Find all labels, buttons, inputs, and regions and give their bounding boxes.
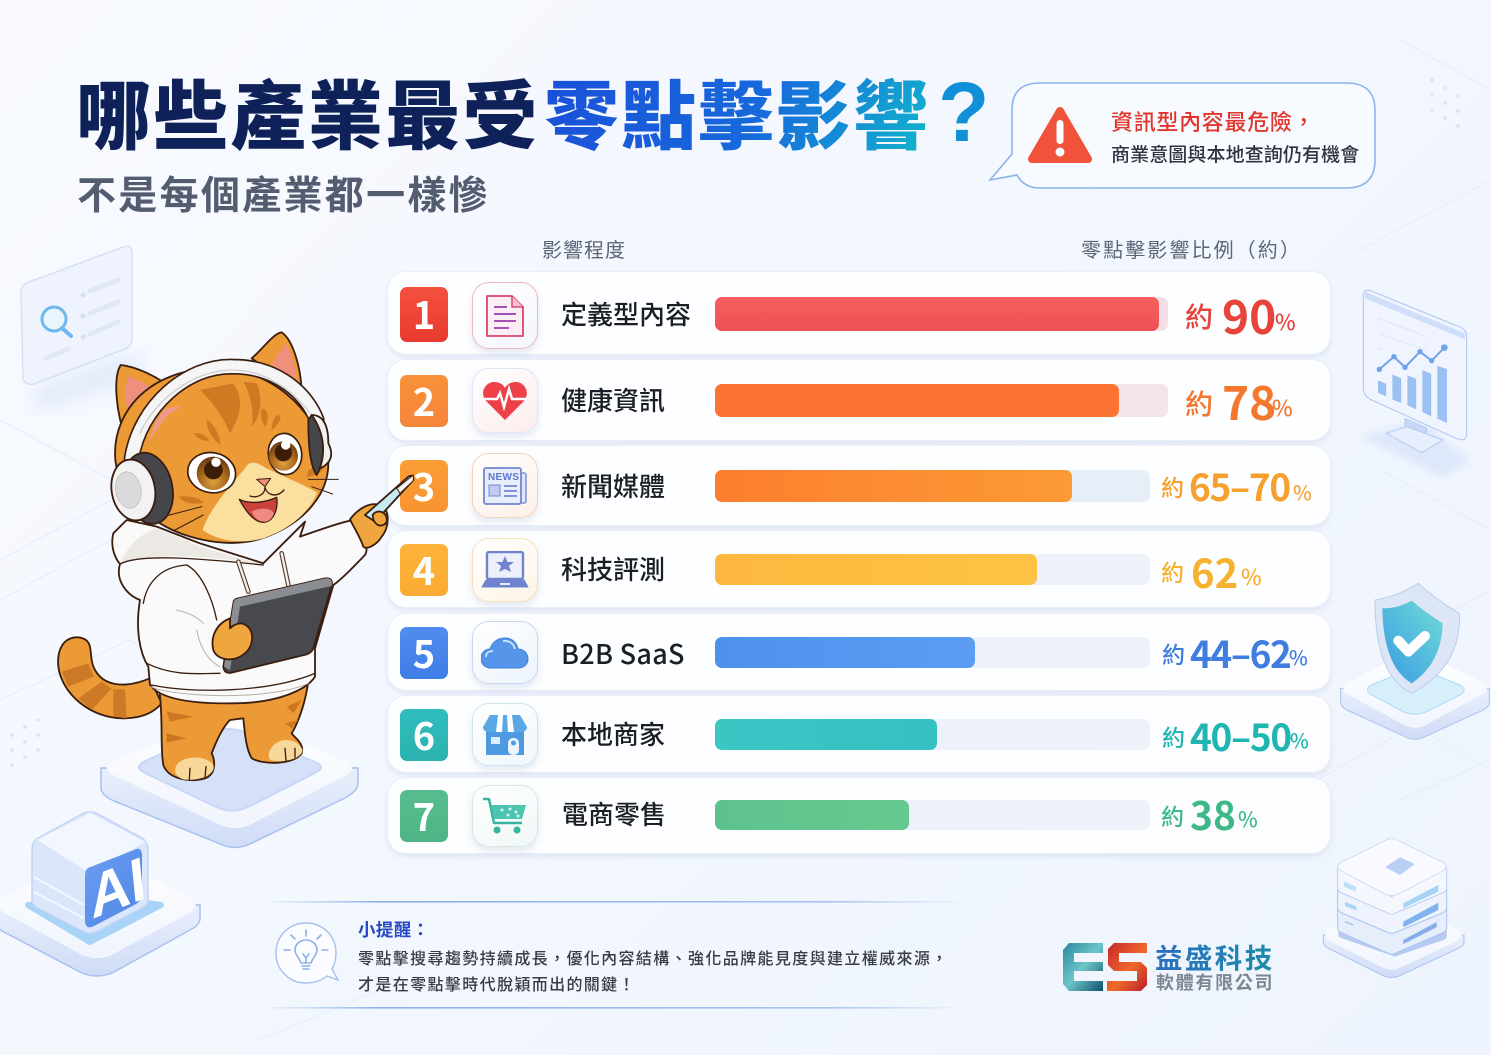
value	[1161, 786, 1258, 842]
label: 科技評測	[561, 550, 665, 587]
title question mark: ?	[938, 65, 989, 159]
rank 3	[400, 460, 448, 512]
value: 約	[1185, 296, 1213, 336]
value: 65–70	[1189, 458, 1290, 512]
divider bottom	[273, 1007, 952, 1009]
value: %	[1275, 305, 1296, 337]
value	[1161, 458, 1312, 512]
icon: AI cube on platform	[0, 812, 200, 976]
rank 6	[400, 709, 448, 761]
platform under cat	[101, 716, 358, 848]
value: 約	[1161, 554, 1184, 588]
tip text: 才是在零點擊時代脫穎而出的關鍵！	[358, 970, 636, 994]
rank 7: 7	[413, 786, 435, 842]
nose and mouth	[239, 478, 284, 522]
eyes	[185, 431, 304, 497]
head	[115, 368, 338, 543]
value: %	[1290, 725, 1309, 754]
divider top	[273, 901, 952, 903]
label: 定義型內容	[561, 295, 691, 332]
logo subtitle: 軟體有限公司	[1156, 969, 1274, 995]
label: 本地商家	[561, 715, 665, 752]
column header: impact level: 影響程度	[542, 234, 626, 263]
rank 7	[400, 790, 448, 842]
cat mascot	[57, 331, 414, 782]
ears	[116, 332, 302, 442]
rank 2	[400, 375, 448, 427]
value: 44–62	[1190, 625, 1290, 679]
rank 2: 2	[413, 372, 435, 426]
row 7: ecommerce	[388, 778, 1330, 853]
rank 5: 5	[413, 624, 435, 678]
row 4: tech review	[388, 531, 1330, 607]
bar	[715, 470, 1150, 502]
bar	[715, 297, 1168, 331]
company logo	[1063, 936, 1275, 995]
tablet	[223, 578, 332, 673]
value	[1162, 708, 1309, 762]
callout headline: 資訊型內容最危險，	[1111, 105, 1315, 137]
tail	[58, 637, 162, 718]
hand on tablet	[212, 618, 252, 659]
value: %	[1289, 642, 1308, 671]
value: 62	[1191, 542, 1238, 600]
bar	[715, 384, 1168, 417]
row 6: local business	[388, 696, 1330, 772]
label: 健康資訊	[561, 381, 665, 418]
callout body: 商業意圖與本地查詢仍有機會	[1111, 140, 1359, 167]
tip text: 零點擊搜尋趨勢持續成長，優化內容結構、強化品牌能見度與建立權威來源，	[358, 945, 949, 969]
icon: shopping cart	[472, 785, 538, 847]
value: 40–50	[1190, 708, 1291, 762]
rank 1	[400, 287, 448, 342]
value: 約	[1161, 469, 1184, 503]
column header: zero-click ratio: 零點擊影響比例（約）	[1081, 234, 1302, 263]
icon: monitor chart	[1360, 290, 1470, 478]
icon: search card	[21, 246, 140, 410]
rank 4: 4	[413, 540, 435, 596]
pointing hand	[350, 504, 388, 548]
value	[1161, 542, 1262, 600]
value: %	[1238, 804, 1258, 834]
subtitle: 不是每個產業都一樣慘	[77, 165, 490, 221]
value: %	[1272, 391, 1293, 423]
value: 約	[1162, 636, 1185, 670]
bar	[715, 719, 1150, 750]
icon: server stack	[1323, 839, 1464, 977]
rank 4	[400, 544, 448, 596]
value	[1185, 282, 1296, 348]
tip text	[358, 945, 949, 994]
rank 3: 3	[413, 456, 435, 512]
logo name: 益盛科技	[1155, 936, 1275, 976]
rank 1: 1	[413, 285, 435, 340]
logo mark	[1063, 943, 1147, 991]
icon: newspaper	[472, 453, 538, 518]
label: 電商零售	[562, 795, 666, 832]
value: 約	[1185, 383, 1213, 423]
icon: laptop	[472, 538, 538, 602]
label: 新聞媒體	[561, 467, 665, 504]
icon: newspaper: NEWS	[488, 472, 519, 482]
icon: AI cube on platform: AI	[87, 843, 148, 932]
icon: storefront	[472, 703, 538, 766]
row 1: definition content	[388, 272, 1330, 354]
value: 90	[1222, 282, 1276, 348]
value: 約	[1161, 798, 1184, 832]
label: B2B SaaS	[561, 633, 685, 672]
value: %	[1293, 477, 1312, 506]
value: 38	[1190, 786, 1236, 842]
bar	[715, 554, 1150, 585]
rank 5	[400, 627, 448, 679]
value: %	[1241, 560, 1262, 592]
value: 約	[1162, 719, 1185, 753]
icon: shield on platform	[1341, 583, 1489, 739]
icon: light bulb bubble	[275, 922, 340, 984]
callout	[988, 82, 1376, 189]
rank 6: 6	[413, 706, 435, 760]
value: 78	[1222, 368, 1276, 434]
tip heading: 小提醒：	[358, 917, 430, 942]
icon: warning triangle	[1028, 107, 1092, 163]
row 3: news	[388, 446, 1330, 525]
headphones	[107, 367, 331, 529]
icon: cloud	[472, 621, 538, 684]
value	[1162, 625, 1308, 679]
value	[1185, 368, 1293, 434]
pen	[365, 475, 413, 526]
legs	[159, 680, 308, 780]
bar	[715, 800, 1150, 830]
row 5: B2B SaaS	[388, 614, 1330, 690]
row 2: health	[388, 360, 1330, 440]
icon: document	[472, 282, 538, 349]
title: 哪些產業最受零點擊影響	[76, 56, 930, 165]
icon: heart	[472, 368, 538, 433]
bar	[715, 637, 1150, 668]
hoodie	[112, 520, 366, 703]
